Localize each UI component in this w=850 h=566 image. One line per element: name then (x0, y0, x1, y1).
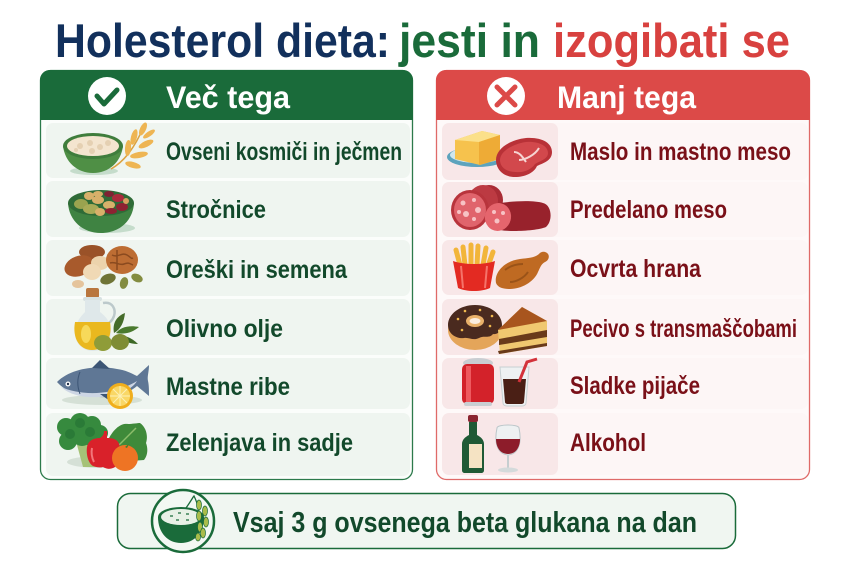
label: alcohol: Alkohol (570, 429, 646, 457)
title: jesti in (398, 14, 540, 67)
label: oily fish: Mastne ribe (166, 373, 290, 401)
label: legumes: Stročnice (166, 196, 266, 224)
heading: less: Manj tega (557, 79, 696, 115)
row: oats and barley (46, 121, 410, 178)
icon: wine bottle and glass (462, 415, 520, 473)
icon: check mark (88, 77, 126, 115)
row: butter and fatty meat (442, 123, 808, 180)
row: nuts and seeds (46, 240, 410, 296)
icon: nuts (61, 245, 144, 290)
label: nuts and seeds: Oreški in semena (166, 256, 348, 284)
row: oily fish (46, 358, 410, 409)
label: sweet drinks: Sladke pijače (570, 372, 700, 400)
heading: more: Več tega (166, 79, 290, 115)
icon: butter and steak (447, 131, 552, 177)
row: pastry with trans fats (442, 299, 808, 355)
label: processed meat: Predelano meso (570, 196, 727, 224)
icon: fries and fried chicken (453, 245, 549, 291)
callout: daily beta glucan (118, 490, 736, 552)
title: Holesterol dieta: (55, 14, 390, 67)
icon: oat bowl badge (152, 490, 214, 552)
icon: donut and cake (448, 305, 547, 354)
row: fried food (442, 240, 808, 295)
row: alcohol (442, 413, 808, 475)
label: fried food: Ocvrta hrana (570, 255, 702, 283)
icon: olive oil bottle (74, 288, 139, 351)
icon: fish with lemon (57, 360, 149, 409)
label: vegetables and fruit: Zelenjava in sadje (166, 429, 353, 457)
icon: legume bowl (68, 190, 135, 233)
row: legumes (46, 181, 410, 237)
title (55, 14, 790, 67)
label: oats and barley: Ovseni kosmiči in ječmen (166, 138, 402, 166)
row: olive oil (46, 288, 410, 355)
icon: wheat sprig (111, 121, 156, 170)
row: processed meat (442, 182, 808, 237)
title: izogibati se (553, 14, 790, 67)
icon: cross mark (487, 77, 525, 115)
panel header: eat less (436, 70, 810, 120)
icon: salami (451, 185, 551, 234)
icon: vegetables (57, 413, 147, 471)
panel: eat more (40, 70, 413, 480)
panel: eat less (436, 70, 810, 480)
label: butter and fatty meat: Maslo in mastno meso (570, 138, 791, 166)
row: vegetables and fruit (46, 413, 410, 476)
row: sweet drinks (442, 358, 808, 409)
callout text: Vsaj 3 g ovsenega beta glukana na dan (233, 507, 697, 539)
icon: oat bowl (63, 121, 156, 175)
panel header: eat more (40, 70, 413, 120)
icon: soda can and glass (462, 358, 537, 406)
label: olive oil: Olivno olje (166, 315, 283, 343)
